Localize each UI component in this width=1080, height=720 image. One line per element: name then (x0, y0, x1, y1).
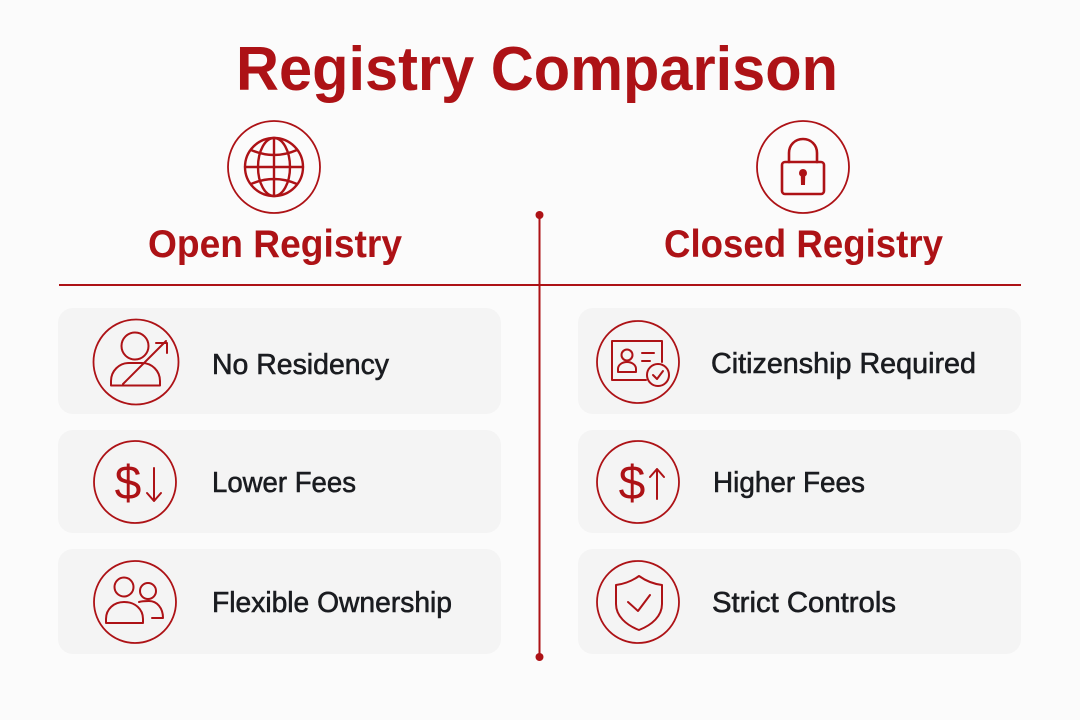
title: Registry Comparison (236, 35, 838, 104)
icon: globe (228, 121, 320, 213)
heading: open registry: Open Registry (148, 223, 403, 266)
heading: closed registry: Closed Registry (664, 223, 944, 266)
icon: shield with check (597, 561, 679, 643)
vertical divider (536, 211, 544, 661)
label: Lower Fees (212, 467, 356, 499)
row: higher fees (578, 430, 1021, 533)
icon: two people (94, 561, 176, 643)
icon: dollar down (94, 441, 176, 523)
icon: padlock (757, 121, 849, 213)
icon: person with arrow (94, 320, 178, 404)
label: No Residency (212, 349, 389, 381)
label: Higher Fees (713, 467, 865, 499)
label: Strict Controls (712, 587, 896, 619)
row: flexible ownership (58, 549, 501, 654)
icon: dollar up: $ (619, 457, 645, 510)
label: Citizenship Required (711, 348, 976, 380)
panel: closed registry rows (578, 308, 1021, 654)
horizontal divider (59, 284, 1021, 286)
panel: open registry rows (58, 308, 501, 654)
icon: dollar down: $ (115, 457, 141, 510)
row: no residency (58, 308, 501, 414)
icon: dollar up (597, 441, 679, 523)
label: Flexible Ownership (212, 587, 452, 619)
row: strict controls (578, 549, 1021, 654)
row: lower fees (58, 430, 501, 533)
row: citizenship required (578, 308, 1021, 414)
icon: id card with check (597, 321, 679, 403)
